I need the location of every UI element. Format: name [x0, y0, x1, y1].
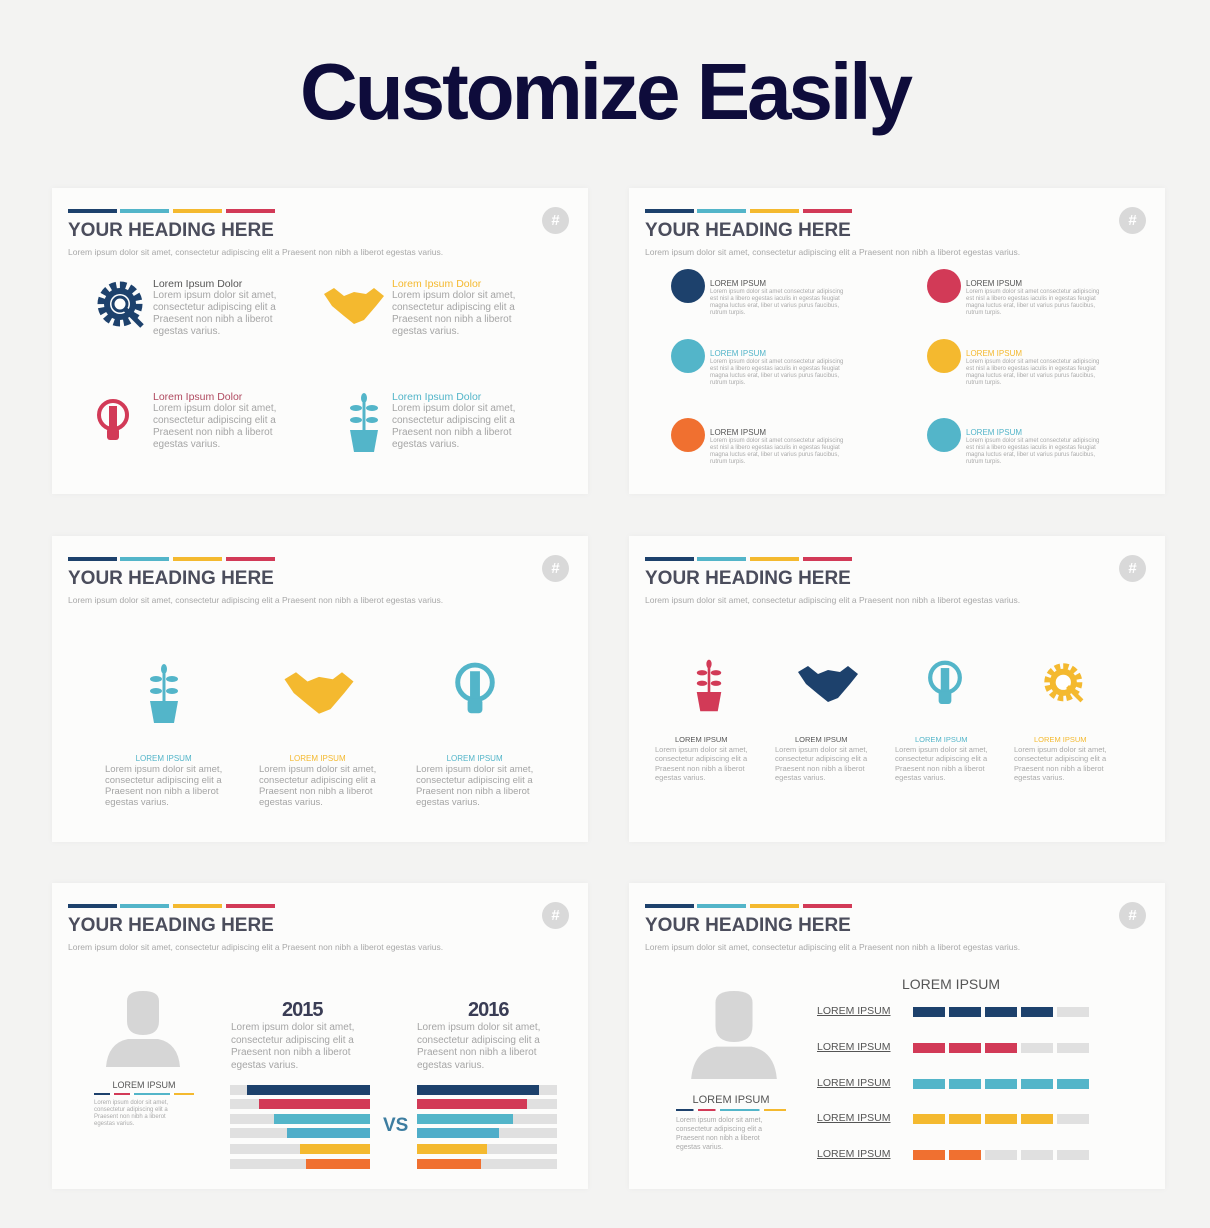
text columns: consectetur adipiscing elit a [1014, 754, 1106, 763]
item: red: rutrum turpis. [966, 310, 1001, 316]
icon: gear yellow [1044, 663, 1084, 702]
text columns: consectetur adipiscing elit a [775, 754, 867, 763]
item: yellow: Lorem ipsum dolor sit amet consectetur adipiscing [966, 359, 1099, 365]
item: navy [671, 269, 843, 316]
item: teal: LOREM IPSUM [710, 349, 766, 358]
text: col 2: Lorem ipsum dolor sit amet, [259, 764, 376, 775]
item: orange: rutrum turpis. [710, 459, 745, 465]
text: col 2: LOREM IPSUM [290, 754, 346, 763]
item: red [927, 269, 1099, 316]
icon: bulb [97, 399, 129, 440]
panel: 2015 vs 2016: Lorem ipsum dolor sit amet, [231, 1022, 354, 1033]
text: person: consectetur adipiscing elit a [676, 1126, 762, 1133]
icon: plant [350, 393, 378, 452]
text columns: egestas varius. [1014, 773, 1064, 782]
panel: six circle icons: YOUR HEADING HERE [645, 220, 851, 241]
text: col 1: Lorem ipsum dolor sit amet, [105, 764, 222, 775]
chart: ratings: LOREM IPSUM [817, 1112, 891, 1124]
item: orange: Lorem ipsum dolor sit amet consectetur adipiscing [710, 438, 843, 444]
panel: four icons row [629, 536, 1165, 842]
text: item 2: Lorem ipsum dolor sit amet, [392, 290, 515, 301]
item: teal [671, 339, 843, 386]
text columns: consectetur adipiscing elit a [655, 754, 747, 763]
item: teal 2: LOREM IPSUM [966, 428, 1022, 437]
panel: six circle icons [629, 188, 1165, 494]
item: navy: rutrum turpis. [710, 310, 745, 316]
text columns: egestas varius. [775, 773, 825, 782]
text: col 1: LOREM IPSUM [136, 754, 192, 763]
panel: 2015 vs 2016: egestas varius. [417, 1060, 484, 1070]
icon: person [106, 991, 180, 1067]
panel: 2015 vs 2016: Praesent non nibh a liberot [417, 1047, 537, 1058]
icon: handshake [284, 672, 354, 714]
item: teal: Lorem ipsum dolor sit amet consectetur adipiscing [710, 359, 843, 365]
text: item 4: egestas varius. [392, 439, 459, 450]
panel: three icons [52, 536, 588, 842]
panel: 2015 vs 2016 [52, 883, 588, 1189]
text: person: Lorem ipsum dolor sit amet, [676, 1117, 762, 1124]
text: col 2: egestas varius. [259, 797, 323, 808]
text: person: egestas varius. [676, 1144, 723, 1151]
item: orange [671, 418, 843, 465]
item: teal 2: Lorem ipsum dolor sit amet consectetur adipiscing [966, 438, 1099, 444]
text: person: egestas varius. [94, 1121, 134, 1127]
panel: skill ratings: Lorem ipsum dolor sit amet, consectetur adipiscing elit a Praesent non nibh a liberot egestas varius. [645, 942, 1020, 952]
panel: three icons: YOUR HEADING HERE [68, 568, 274, 589]
panel: 2015 vs 2016: Lorem ipsum dolor sit amet, consectetur adipiscing elit a Praesent non nibh a liberot egestas varius. [68, 942, 443, 952]
panel: 2015 vs 2016: consectetur adipiscing elit a [231, 1034, 354, 1046]
panel: 2015 vs 2016: Praesent non nibh a liberot [231, 1047, 351, 1058]
text columns: LOREM IPSUM [915, 735, 968, 744]
chart: ratings: LOREM IPSUM [817, 1148, 891, 1160]
item: red: LOREM IPSUM [966, 279, 1022, 288]
icon: handshake [324, 288, 384, 324]
text columns: LOREM IPSUM [1034, 735, 1087, 744]
text: item 2: consectetur adipiscing elit a [392, 302, 515, 313]
text: item 1: Lorem Ipsum Dolor [153, 278, 242, 290]
icon: plant red [696, 660, 722, 712]
text columns: Lorem ipsum dolor sit amet, [1014, 744, 1107, 754]
text columns: egestas varius. [895, 773, 945, 782]
item: teal: magna luctus erat, liber ut varius purus faucibus, [710, 373, 839, 379]
item: yellow: magna luctus erat, liber ut varius purus faucibus, [966, 373, 1095, 379]
item: teal 2: magna luctus erat, liber ut varius purus faucibus, [966, 452, 1095, 458]
text: person: Praesent non nibh a liberot [94, 1114, 166, 1120]
text: item 4: Praesent non nibh a liberot [392, 427, 512, 438]
text: person: Lorem ipsum dolor sit amet, [94, 1100, 168, 1106]
item: teal 2 [927, 418, 1099, 465]
text: person: consectetur adipiscing elit a [94, 1107, 168, 1113]
panel: 2015 vs 2016: # [551, 907, 560, 924]
text: item 1: Praesent non nibh a liberot [153, 314, 273, 325]
panel: four icons with text [52, 188, 588, 494]
icon: plant [150, 664, 178, 723]
text: item 2: egestas varius. [392, 326, 459, 337]
text columns: consectetur adipiscing elit a [895, 754, 987, 763]
text: col 3: Lorem ipsum dolor sit amet, [416, 764, 533, 775]
panel: six circle icons: Lorem ipsum dolor sit amet, consectetur adipiscing elit a Praesent non nibh a liberot egestas varius. [645, 247, 1020, 257]
text columns: Lorem ipsum dolor sit amet, [895, 744, 988, 754]
text: person: Praesent non nibh a liberot [676, 1135, 760, 1142]
text columns: Praesent non nibh a liberot [655, 764, 745, 772]
text columns: egestas varius. [655, 773, 705, 782]
text: item 3 [153, 391, 276, 450]
item: teal: est nisl a libero egestas iaculis in egestas feugiat [710, 366, 840, 372]
panel: three icons: # [551, 560, 560, 577]
text: item 3: Praesent non nibh a liberot [153, 427, 273, 438]
text: item 3: consectetur adipiscing elit a [153, 415, 276, 426]
item: yellow [927, 339, 1099, 386]
text: item 1 [153, 278, 276, 337]
item: orange: magna luctus erat, liber ut varius purus faucibus, [710, 452, 839, 458]
text: col 3: Praesent non nibh a liberot [416, 786, 530, 797]
text: person [94, 1080, 194, 1127]
text: item 4: Lorem ipsum dolor sit amet, [392, 403, 515, 414]
panel: three icons: Lorem ipsum dolor sit amet, consectetur adipiscing elit a Praesent non nibh a liberot egestas varius. [68, 595, 443, 605]
text: col 2 [259, 754, 376, 808]
text: item 1: Lorem ipsum dolor sit amet, [153, 290, 276, 301]
text columns: LOREM IPSUM [675, 735, 728, 744]
panel: 2015 vs 2016: egestas varius. [231, 1060, 298, 1070]
text: col 3 [416, 754, 533, 808]
panel: four icons row: Lorem ipsum dolor sit amet, consectetur adipiscing elit a Praesent non nibh a liberot egestas varius. [645, 595, 1020, 605]
item: orange: LOREM IPSUM [710, 428, 766, 437]
chart: 2015 bars [230, 1085, 370, 1169]
icon: gear magnifier [98, 282, 144, 328]
vs label: VS [383, 1115, 408, 1136]
text: item 2: Praesent non nibh a liberot [392, 314, 512, 325]
chart: 2016 bars [417, 1085, 557, 1169]
text columns: Lorem ipsum dolor sit amet, [775, 744, 868, 754]
panel: four icons with text: # [551, 212, 560, 229]
item: navy: Lorem ipsum dolor sit amet consectetur adipiscing [710, 289, 843, 295]
panel: four icons row: YOUR HEADING HERE [645, 568, 851, 589]
panel: six circle icons: # [1128, 212, 1137, 229]
title: Customize Easily [300, 47, 910, 136]
text columns: Lorem ipsum dolor sit amet, [655, 744, 748, 754]
panel: 2015 vs 2016: YOUR HEADING HERE [68, 915, 274, 936]
text: item 3: Lorem ipsum dolor sit amet, [153, 403, 276, 414]
text: item 4: Lorem Ipsum Dolor [392, 391, 481, 403]
text: col 2: Praesent non nibh a liberot [259, 786, 373, 797]
text: item 4 [392, 391, 515, 450]
chart: ratings: LOREM IPSUM [817, 1077, 891, 1089]
text: item 3: Lorem Ipsum Dolor [153, 391, 242, 403]
text: col 1: consectetur adipiscing elit a [105, 775, 222, 786]
text: col 1: Praesent non nibh a liberot [105, 786, 219, 797]
year 2016: 2016 [468, 999, 508, 1021]
text: item 1: egestas varius. [153, 326, 220, 337]
text: person: LOREM IPSUM [692, 1094, 770, 1106]
text: item 4: consectetur adipiscing elit a [392, 415, 515, 426]
panel: skill ratings [629, 883, 1165, 1189]
text: item 3: egestas varius. [153, 439, 220, 450]
text columns: Praesent non nibh a liberot [1014, 764, 1104, 772]
text: item 2 [392, 278, 515, 337]
text columns: Praesent non nibh a liberot [775, 764, 865, 772]
chart: ratings [817, 1005, 1089, 1160]
panel: four icons row: # [1128, 560, 1137, 577]
item: teal: rutrum turpis. [710, 380, 745, 386]
icon: bulb teal [928, 660, 962, 704]
panel: skill ratings: YOUR HEADING HERE [645, 915, 851, 936]
chart: ratings: LOREM IPSUM [817, 1041, 891, 1053]
item: teal 2: rutrum turpis. [966, 459, 1001, 465]
text columns: Praesent non nibh a liberot [895, 764, 985, 772]
text columns [655, 735, 1107, 782]
text: col 2: consectetur adipiscing elit a [259, 775, 376, 786]
item: yellow: rutrum turpis. [966, 380, 1001, 386]
item: teal 2: est nisl a libero egestas iaculis in egestas feugiat [966, 445, 1096, 451]
text: item 1: consectetur adipiscing elit a [153, 302, 276, 313]
text: person: LOREM IPSUM [112, 1080, 176, 1090]
text: col 1: egestas varius. [105, 797, 169, 808]
panel: 2015 vs 2016: consectetur adipiscing elit a [417, 1034, 540, 1046]
text: col 3: egestas varius. [416, 797, 480, 808]
panel: 2015 vs 2016: Lorem ipsum dolor sit amet, [417, 1022, 540, 1033]
icon: bulb [455, 662, 495, 714]
panel: four icons with text: Lorem ipsum dolor sit amet, consectetur adipiscing elit a Praesent non nibh a liberot egestas varius. [68, 247, 443, 257]
panel: four icons with text: YOUR HEADING HERE [68, 220, 274, 241]
panel: skill ratings: # [1128, 907, 1137, 924]
item: red: magna luctus erat, liber ut varius purus faucibus, [966, 303, 1095, 309]
year 2015: 2015 [282, 999, 322, 1021]
item: navy: LOREM IPSUM [710, 279, 766, 288]
text: col 3: consectetur adipiscing elit a [416, 775, 533, 786]
item: yellow: est nisl a libero egestas iaculis in egestas feugiat [966, 366, 1096, 372]
icon: person [691, 991, 777, 1079]
item: navy: est nisl a libero egestas iaculis in egestas feugiat [710, 296, 840, 302]
text: item 2: Lorem Ipsum Dolor [392, 278, 481, 290]
item: navy: magna luctus erat, liber ut varius purus faucibus, [710, 303, 839, 309]
item: red: est nisl a libero egestas iaculis in egestas feugiat [966, 296, 1096, 302]
chart: ratings: LOREM IPSUM [817, 1005, 891, 1017]
chart title: LOREM IPSUM [902, 976, 1000, 992]
text columns: LOREM IPSUM [795, 735, 848, 744]
item: yellow: LOREM IPSUM [966, 349, 1022, 358]
text: col 1 [105, 754, 222, 808]
icon: handshake navy [798, 666, 858, 702]
text: person [676, 1094, 786, 1151]
item: orange: est nisl a libero egestas iaculis in egestas feugiat [710, 445, 840, 451]
item: red: Lorem ipsum dolor sit amet consectetur adipiscing [966, 289, 1099, 295]
text: col 3: LOREM IPSUM [447, 754, 503, 763]
